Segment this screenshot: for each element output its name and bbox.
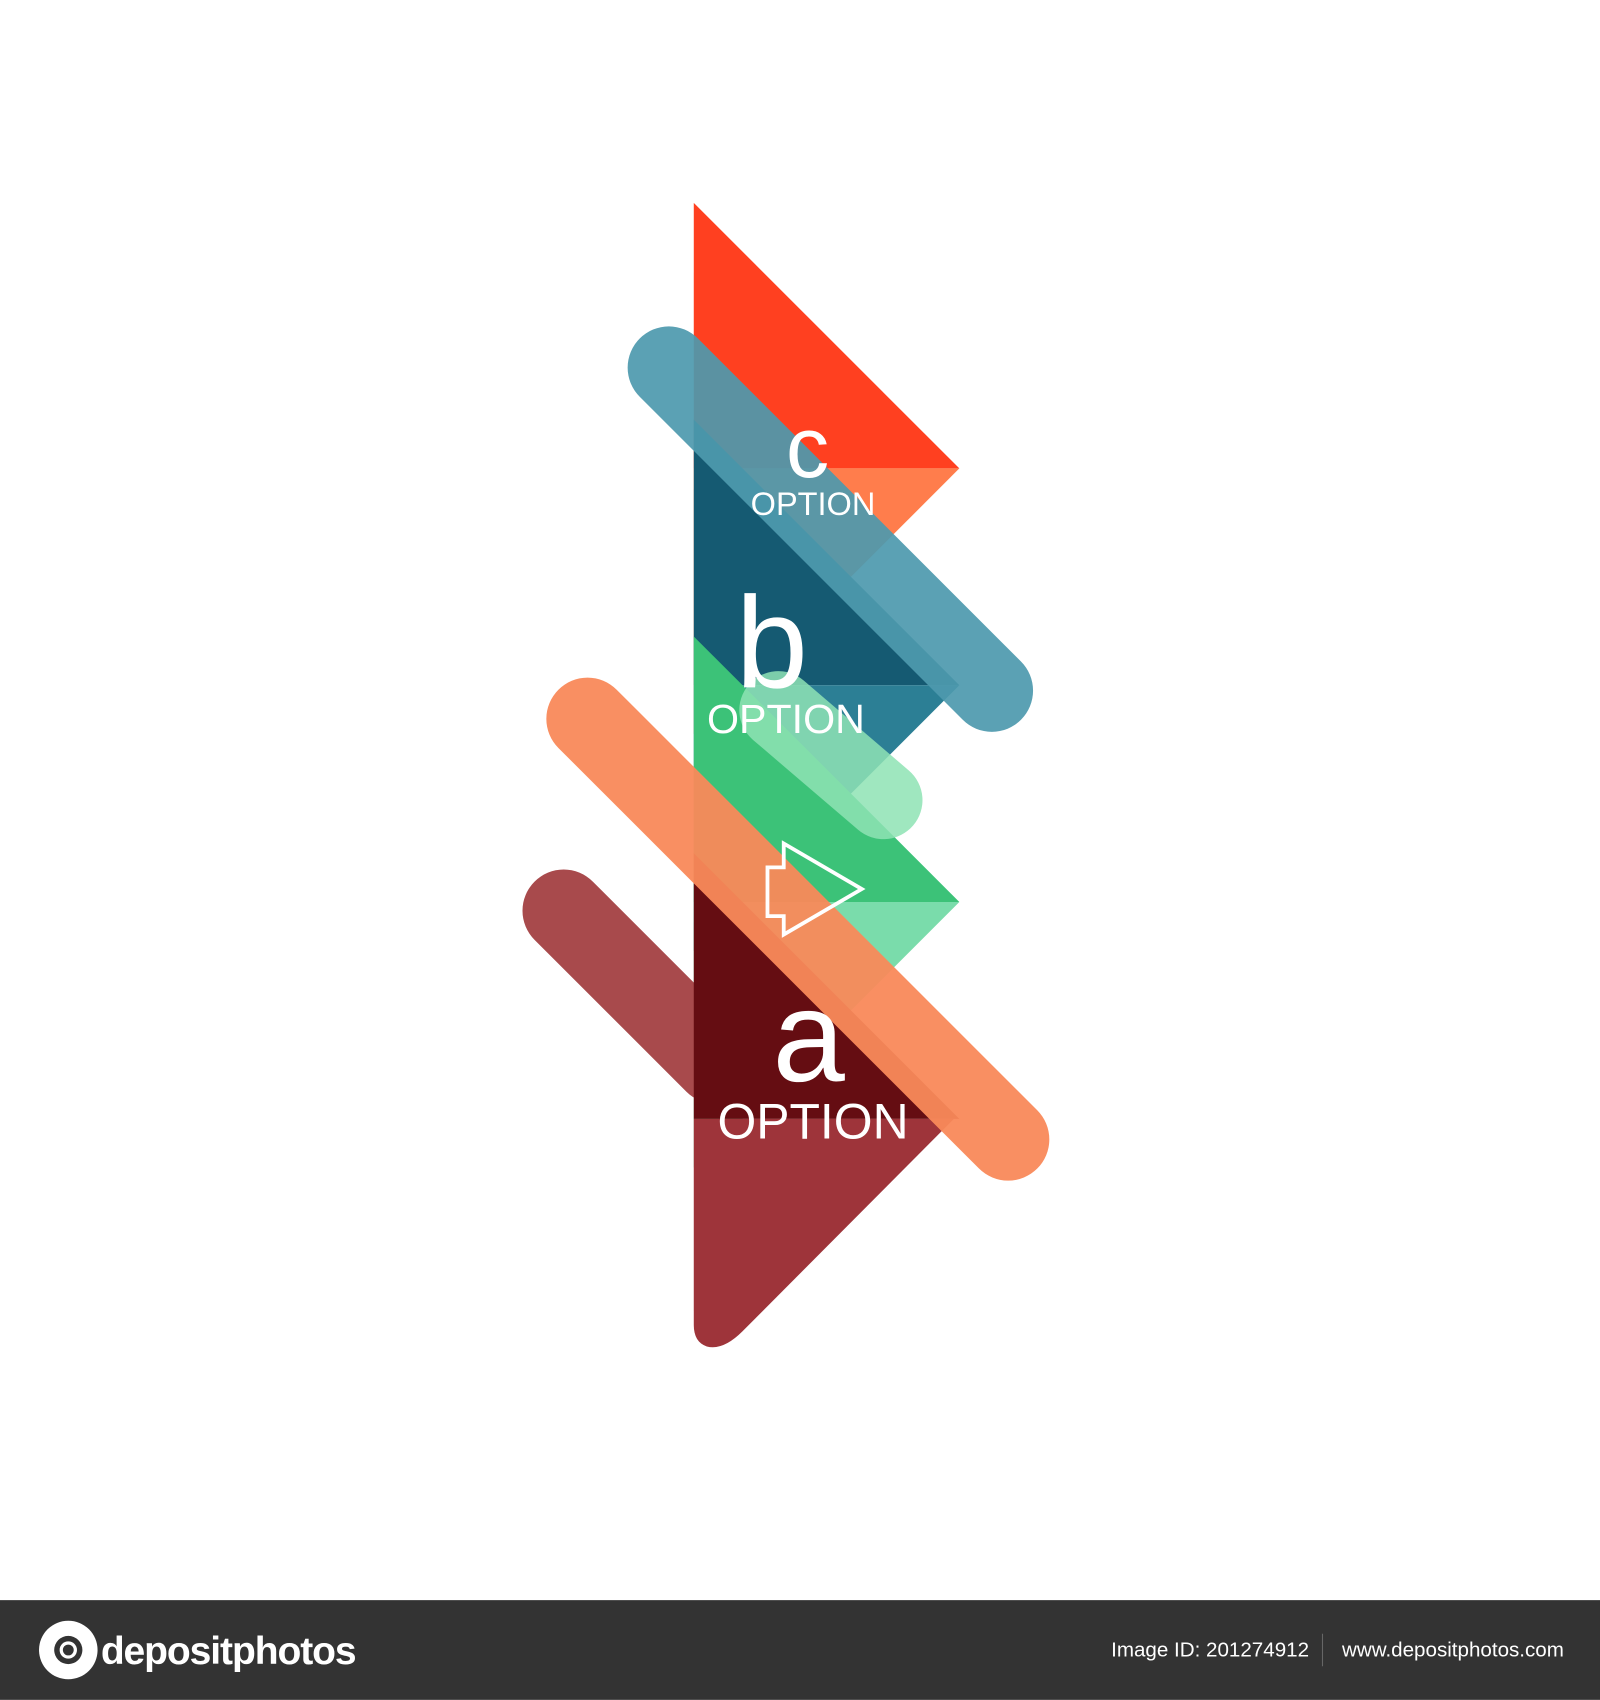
icon: arrow outline: [767, 843, 862, 935]
triangle: green: [694, 636, 959, 1168]
label: option c: OPTION: [751, 486, 875, 522]
label: option b: [707, 569, 865, 742]
triangle: option a (dark red): [694, 853, 959, 1347]
bar: teal diagonal: [669, 368, 992, 691]
image id: Image ID: 201274912: [1111, 1639, 1309, 1662]
triangle: option c (red): [694, 203, 959, 734]
label: option a: a: [773, 963, 846, 1109]
label: option b: OPTION: [707, 696, 865, 742]
label: option a: OPTION: [717, 1093, 909, 1149]
bar: muted red diagonal: [564, 911, 715, 1062]
bar: orange diagonal: [588, 719, 1008, 1139]
label: option c: [751, 399, 875, 522]
bar: light green: [778, 710, 883, 800]
label: option c: c: [786, 399, 829, 496]
icon: camera logo: [39, 1621, 98, 1679]
footer bar: [0, 1600, 1600, 1700]
website: www.depositphotos.com: [1341, 1639, 1564, 1662]
logo text: depositphotos: [101, 1630, 356, 1673]
triangle: option b (teal): [694, 420, 959, 951]
infographic arrow stack: [564, 203, 1008, 1347]
label: option b: b: [736, 569, 808, 715]
label: option a: [717, 963, 909, 1149]
